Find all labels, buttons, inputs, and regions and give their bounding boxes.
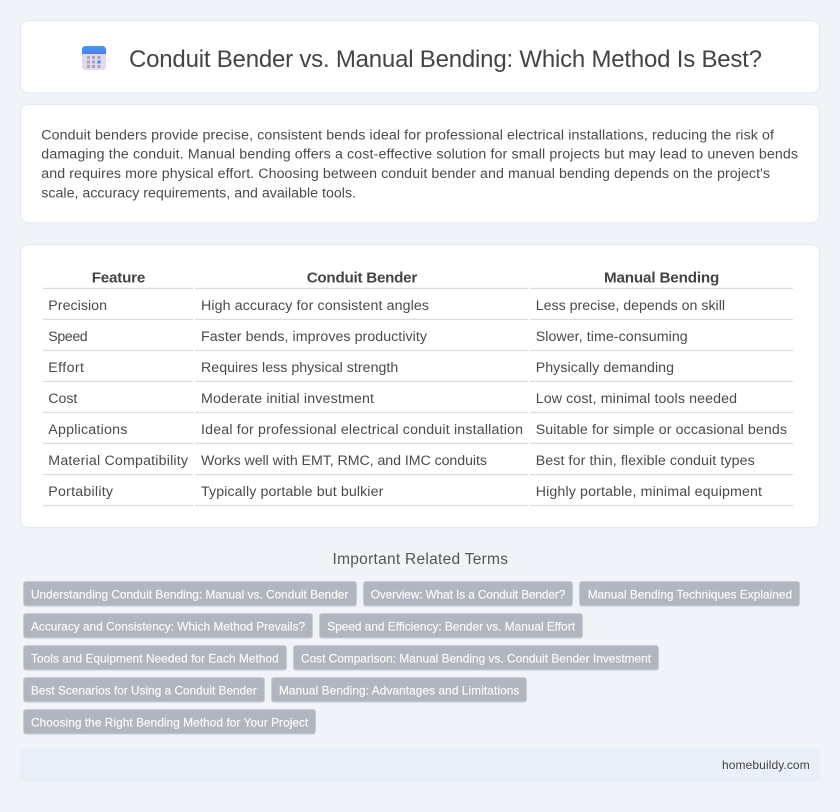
row: material compatibility: Best for thin, flexible conduit types	[536, 453, 755, 469]
tag: Best Scenarios for Using a Conduit Bender	[31, 683, 257, 697]
icon: calendar	[82, 46, 106, 70]
row: effort: Physically demanding	[536, 360, 674, 376]
row: cost: Moderate initial investment	[201, 391, 374, 407]
intro paragraph: and requires more physical effort. Choosing between conduit bender and manual bending depends on the project's	[41, 166, 770, 182]
row: portability: Typically portable but bulkier	[201, 484, 384, 500]
intro paragraph: Conduit benders provide precise, consistent bends ideal for professional electrical installations, reducing the risk of	[41, 127, 774, 143]
tag: Cost Comparison: Manual Bending vs. Conduit Bender Investment	[301, 651, 652, 665]
row: applications: Ideal for professional electrical conduit installation	[201, 422, 523, 438]
row: portability	[48, 484, 762, 500]
tag: Speed and Efficiency: Bender vs. Manual Effort	[327, 619, 576, 633]
tag: Accuracy and Consistency: Which Method Prevails?	[31, 619, 305, 633]
footer source: homebuildy.com	[722, 758, 810, 772]
row: material compatibility: Material Compatibility	[48, 453, 189, 469]
row: cost: Cost	[48, 391, 77, 407]
tag	[24, 678, 264, 702]
tag: Tools and Equipment Needed for Each Method	[31, 651, 279, 665]
row: effort	[48, 360, 674, 376]
tag	[24, 646, 286, 670]
related term tags	[24, 582, 800, 734]
tag	[24, 582, 356, 606]
table header row: Manual Bending	[604, 270, 719, 287]
panel: header	[20, 20, 820, 93]
tag: Overview: What Is a Conduit Bender?	[371, 587, 566, 601]
heading: related terms: Important Related Terms	[332, 551, 508, 568]
row: speed: Slower, time-consuming	[536, 329, 688, 345]
tag	[320, 614, 582, 638]
tag: Manual Bending Techniques Explained	[588, 587, 792, 601]
row: portability: Highly portable, minimal equipment	[536, 484, 762, 500]
tag	[580, 582, 800, 606]
row: precision: Precision	[48, 298, 107, 314]
panel: comparison table	[20, 244, 820, 528]
intro paragraph: damaging the conduit. Manual bending offers a cost-effective solution for small projects but may lead to uneven bends	[41, 147, 798, 163]
row: precision: High accuracy for consistent angles	[201, 298, 429, 314]
panel: introduction	[20, 104, 820, 223]
tag: Understanding Conduit Bending: Manual vs. Conduit Bender	[31, 587, 348, 601]
title: Conduit Bender vs. Manual Bending: Which Method Is Best?	[129, 46, 762, 73]
row: portability: Portability	[48, 484, 114, 500]
row: material compatibility	[48, 453, 755, 469]
row: applications	[48, 422, 787, 438]
row: speed	[48, 329, 688, 345]
tag	[24, 614, 312, 638]
tag: Manual Bending: Advantages and Limitations	[279, 683, 519, 697]
row: speed: Faster bends, improves productivity	[201, 329, 428, 345]
row: cost: Low cost, minimal tools needed	[536, 391, 737, 407]
row: cost	[48, 391, 737, 407]
table rules	[43, 288, 793, 506]
row: material compatibility: Works well with EMT, RMC, and IMC conduits	[201, 453, 487, 469]
row: precision: Less precise, depends on skill	[536, 298, 725, 314]
intro paragraph	[41, 127, 798, 202]
row: applications: Applications	[48, 422, 127, 438]
row: precision	[48, 298, 725, 314]
tag	[294, 646, 658, 670]
tag	[24, 710, 316, 734]
table header row: Conduit Bender	[307, 270, 417, 287]
row: effort: Effort	[48, 360, 84, 376]
footer	[20, 748, 820, 782]
tag: Choosing the Right Bending Method for Your Project	[31, 715, 309, 729]
tag	[364, 582, 572, 606]
intro paragraph: scale, accuracy requirements, and available tools.	[41, 186, 356, 202]
table header row	[92, 270, 719, 287]
row: applications: Suitable for simple or occasional bends	[536, 422, 787, 438]
row: effort: Requires less physical strength	[201, 360, 398, 376]
row: speed: Speed	[48, 329, 88, 345]
tag	[272, 678, 526, 702]
table header row: Feature	[92, 270, 145, 287]
